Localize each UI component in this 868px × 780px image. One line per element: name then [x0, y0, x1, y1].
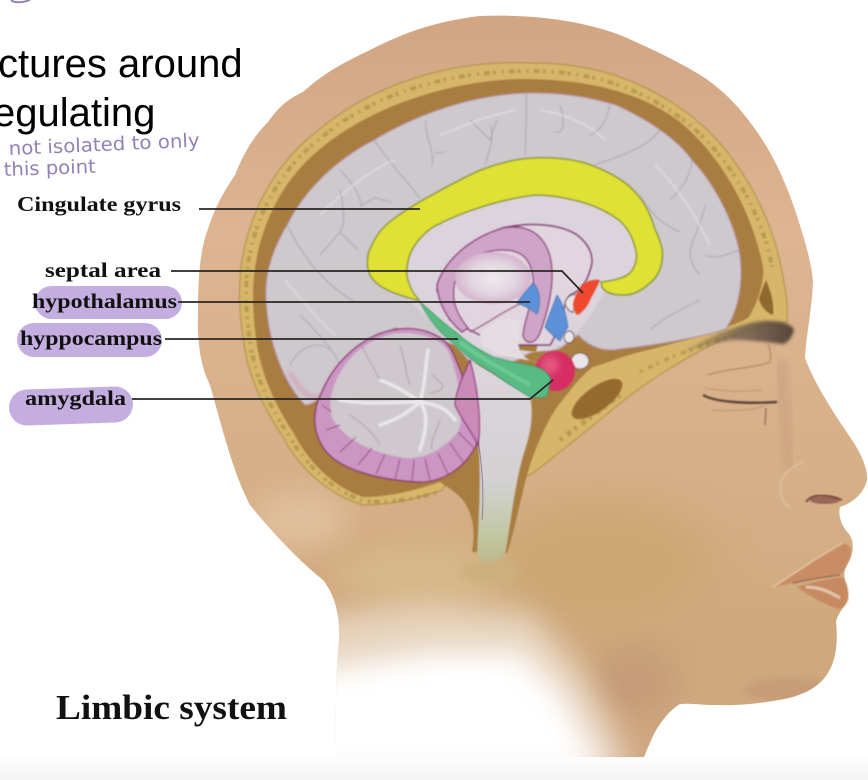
leader lines: [132, 209, 583, 399]
skull bone texture: [246, 71, 772, 502]
brainstem: [470, 360, 532, 564]
cerebellum: [315, 329, 477, 482]
hippocampus green band: [420, 302, 550, 398]
label: cingulate gyrus: Cingulate gyrus: [17, 192, 181, 216]
highlight: hypothalamus: [35, 286, 182, 319]
handwritten note: this point: [3, 156, 96, 181]
eyebrow: [683, 321, 794, 352]
fornix and thalamus group: [437, 225, 592, 362]
pons pink wedge: [455, 360, 479, 445]
heading fragment: ctures around: [0, 42, 243, 86]
highlight: hyppocampus: [17, 323, 162, 357]
thalamus: [455, 252, 531, 304]
background strip: [0, 757, 868, 780]
septal pocket: [437, 225, 592, 345]
brown floor near hypothalamus: [515, 329, 540, 352]
brainstem bottom fade: [460, 561, 520, 583]
skull bone: [239, 63, 787, 505]
pink edge glow on rear lobe: [290, 345, 365, 397]
region labels: [17, 192, 181, 410]
cerebral hemisphere: [266, 93, 741, 405]
handwritten note: not isolated to only: [8, 130, 200, 160]
inner lavender zone: [405, 193, 639, 360]
cingulate gyrus yellow band: [367, 158, 663, 300]
fornix band: [437, 227, 552, 342]
highlight: amygdala: [8, 386, 134, 426]
head silhouette: [190, 10, 868, 775]
caption: limbic system: Limbic system: [56, 688, 287, 727]
label: hypothalamus: hypothalamus: [32, 289, 177, 313]
sinus cavity: [566, 372, 628, 426]
label: septal area: septal area: [45, 258, 162, 282]
skin shading: [504, 498, 703, 612]
handwritten top fragment: [11, 0, 30, 2]
neck fade: soft outer layer: [334, 592, 638, 757]
eye closed: [703, 344, 777, 425]
cerebellar white matter: [330, 333, 461, 458]
neck fade: inner layer: [336, 636, 612, 757]
amygdala pink sphere: [535, 351, 575, 391]
handwritten note: [3, 130, 200, 181]
label: amygdala: amygdala: [25, 386, 127, 410]
nose: [780, 360, 842, 507]
lips: [773, 543, 851, 609]
icon: blue hypothalamus patches: [517, 283, 568, 341]
heading fragment: [0, 42, 243, 135]
label: hyppocampus: hyppocampus: [20, 326, 162, 350]
brain sulci: [287, 94, 740, 380]
white tubes near optic chiasm: [564, 295, 589, 369]
frontal sinus: [759, 280, 773, 315]
dura and skull cavity: [253, 79, 763, 553]
midbrain light area: [480, 319, 537, 362]
cerebellar folia: [322, 405, 473, 481]
icon: red septal area: [573, 280, 600, 315]
